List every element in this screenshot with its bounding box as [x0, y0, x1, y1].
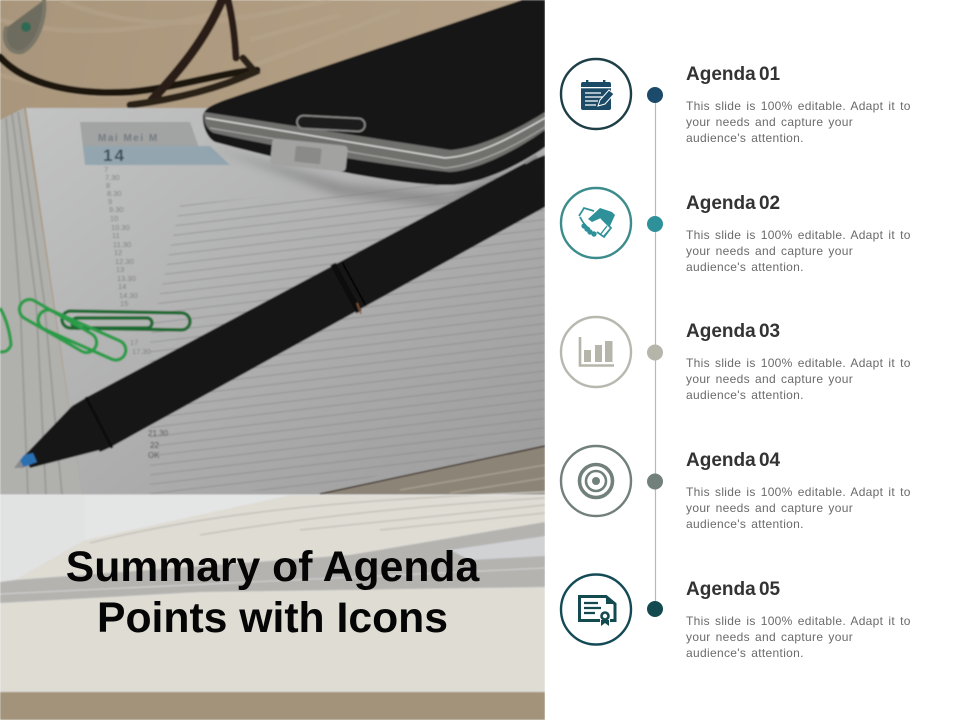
notebook page: 12.30	[115, 257, 134, 266]
agenda 02 text: audience's attention.	[686, 260, 804, 274]
agenda 03 text: your needs and capture your	[686, 372, 853, 386]
item 4 circle, target icon and dot	[561, 446, 663, 516]
agenda 02 heading: Agenda 02	[686, 193, 780, 214]
notebook page: 22	[150, 441, 159, 450]
notebook page: 12	[114, 248, 122, 257]
agenda 01 heading: Agenda 01	[686, 64, 780, 85]
pen	[14, 155, 545, 468]
book edge left	[0, 108, 82, 495]
smartphone	[203, 0, 545, 185]
notebook page: 8	[106, 181, 110, 190]
agenda 02 text: This slide is 100% editable. Adapt it to	[686, 228, 911, 242]
notebook page	[26, 108, 545, 495]
agenda 04 heading: Agenda 04	[686, 450, 780, 471]
item 5 circle, certificate icon and dot	[561, 574, 663, 644]
notebook page: 14.30	[119, 291, 138, 300]
agenda 02 text	[686, 228, 911, 274]
notebook page: 15	[120, 299, 128, 308]
agenda 05 heading: Agenda 05	[686, 579, 780, 600]
agenda 04 text	[686, 485, 911, 531]
agenda 01 text: your needs and capture your	[686, 115, 853, 129]
agenda 02 text: your needs and capture your	[686, 244, 853, 258]
agenda 04 text: This slide is 100% editable. Adapt it to	[686, 485, 911, 499]
glasses	[0, 0, 257, 105]
agenda 05 text: audience's attention.	[686, 646, 804, 660]
agenda 04 text: audience's attention.	[686, 517, 804, 531]
agenda 03 text: This slide is 100% editable. Adapt it to	[686, 356, 911, 370]
notebook page: 13	[116, 265, 124, 274]
agenda 01 text: audience's attention.	[686, 131, 804, 145]
agenda 01 text	[686, 99, 911, 145]
notebook page: Mai Mei M	[98, 133, 159, 144]
agenda 03 text	[686, 356, 911, 402]
notebook page: 11.30	[113, 240, 131, 249]
item 1 circle, calendar icon and dot	[561, 59, 663, 129]
agenda 01 text: This slide is 100% editable. Adapt it to	[686, 99, 911, 113]
notebook page: 9.30	[109, 205, 124, 214]
notebook page: 13.30	[117, 274, 136, 283]
notebook page: 7	[104, 165, 108, 174]
translucent title band	[0, 492, 545, 692]
agenda 05 text: This slide is 100% editable. Adapt it to	[686, 614, 911, 628]
notebook page: 17.30	[132, 347, 151, 356]
title: Points with Icons	[97, 594, 448, 642]
notebook page: 14	[103, 146, 126, 165]
notebook page: 17	[130, 338, 138, 347]
timeline with icons and dots	[560, 58, 663, 646]
item 2 circle, handshake icon and dot	[561, 188, 663, 258]
timeline vertical line	[654, 95, 656, 609]
notebook page: 11	[112, 231, 120, 240]
item 3 circle, bar chart icon and dot	[561, 317, 663, 387]
phone shadow	[205, 145, 545, 205]
wooden table	[0, 0, 545, 720]
notebook page: 10	[110, 214, 118, 223]
background photo of desk with notebook, phone and pen	[0, 0, 545, 720]
notebook page: 10.30	[111, 223, 130, 232]
agenda 04 text: your needs and capture your	[686, 501, 853, 515]
agenda 05 text: your needs and capture your	[686, 630, 853, 644]
agenda 03 text: audience's attention.	[686, 388, 804, 402]
title	[66, 543, 480, 642]
notebook page: OK	[148, 451, 160, 460]
agenda 03 heading: Agenda 03	[686, 321, 780, 342]
bottom wood strip	[0, 692, 545, 720]
paper clips	[0, 296, 190, 363]
agenda 05 text	[686, 614, 911, 660]
notebook page: 9	[108, 197, 112, 206]
notebook page: 8.30	[107, 189, 122, 198]
notebook page: 14	[118, 282, 126, 291]
lower book pages	[320, 446, 545, 495]
title: Summary of Agenda	[66, 543, 479, 591]
notebook page: 21.30	[148, 429, 169, 438]
notebook page: 7.30	[105, 173, 120, 182]
